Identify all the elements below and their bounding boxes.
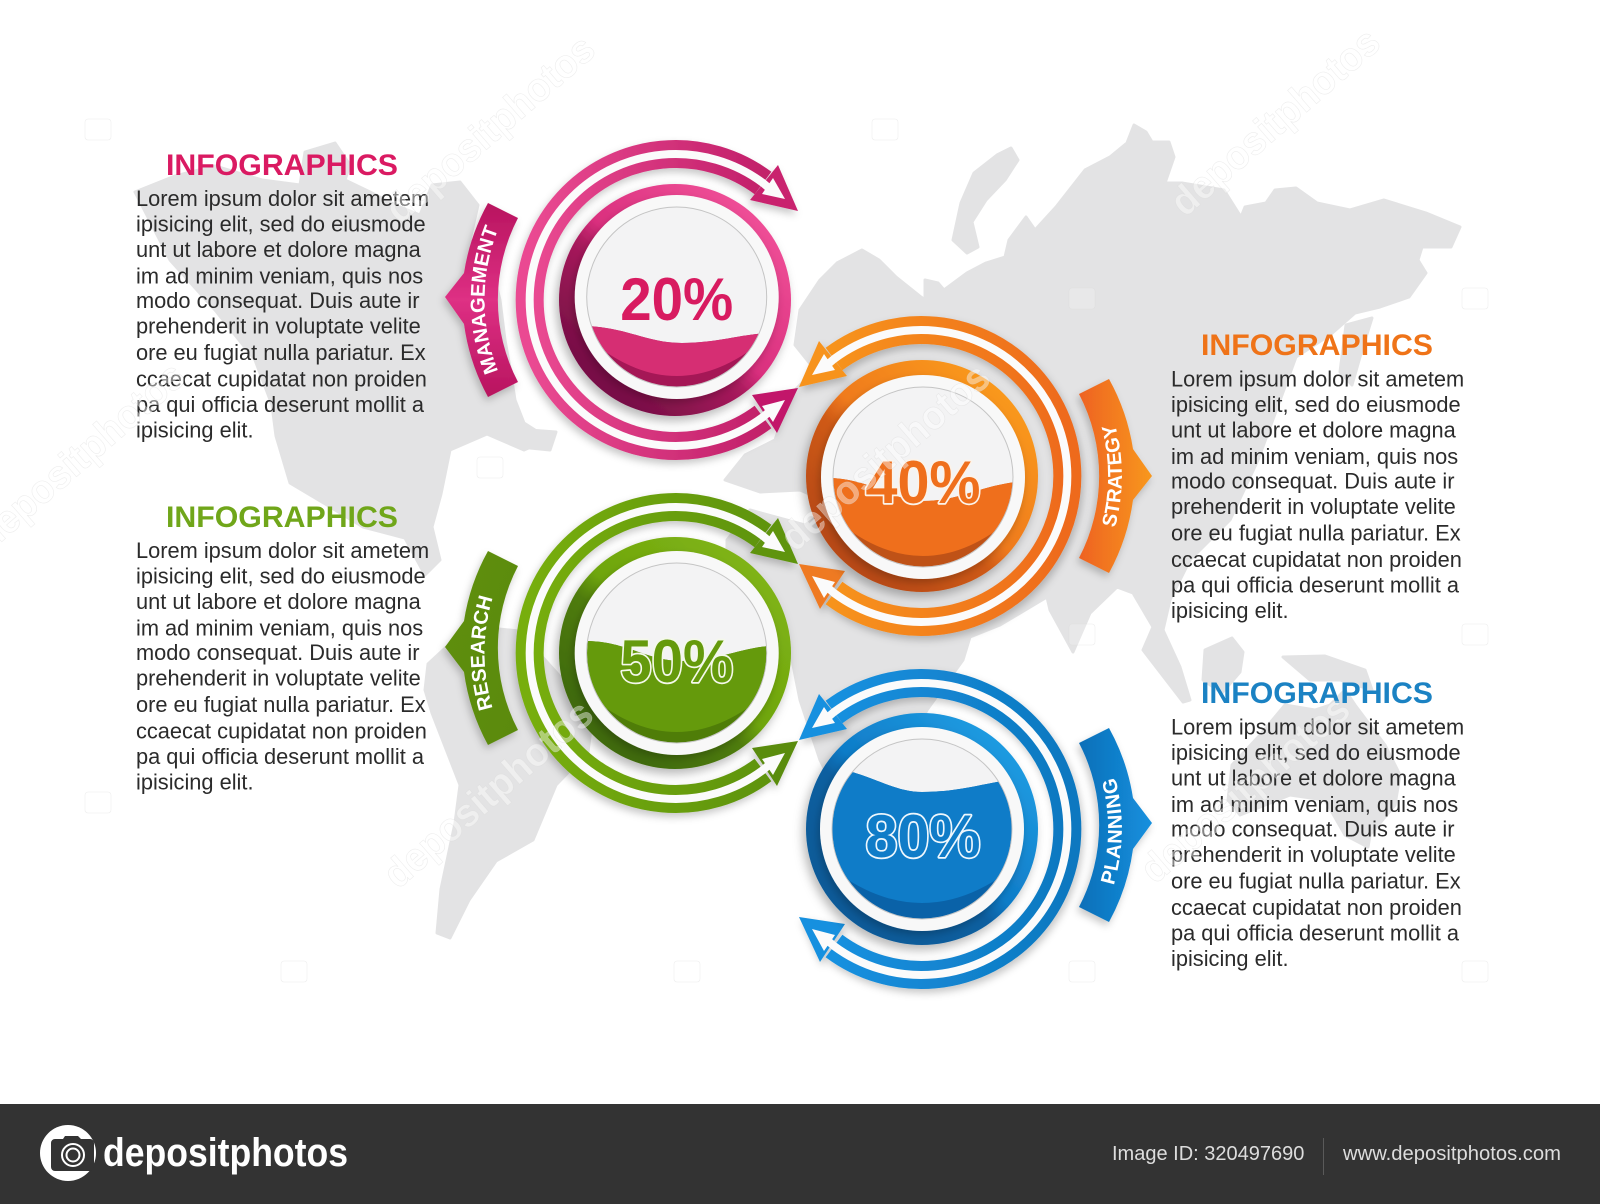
watermark overlay: depositphotos (375, 692, 602, 897)
ribbon: strategy (1076, 379, 1152, 578)
text block: pink infographics: ipisicing elit. (136, 418, 254, 443)
arrows: green circular (530, 507, 798, 799)
panel: planning (blue) (798, 669, 1464, 997)
text block: orange infographics: ore eu fugiat nulla pariatur. Ex (1171, 521, 1461, 546)
world map (135, 125, 1460, 938)
arrows: pink circular (530, 154, 798, 446)
text block: orange infographics: pa qui officia deserunt mollit a (1171, 573, 1460, 598)
text block: green infographics: modo consequat. Duis aute ir (136, 640, 420, 665)
ribbon: management: MANAGEMENT (470, 224, 498, 375)
text block: orange infographics: prehenderit in voluptate velite (1171, 494, 1456, 519)
watermark overlay: depositphotos (1132, 687, 1359, 892)
text block: pink infographics: pa qui officia deserunt mollit a (136, 392, 425, 417)
text block: green infographics: ipisicing elit, sed do eiusmode (136, 564, 426, 588)
text block: green infographics: prehenderit in voluptate velite (136, 666, 421, 690)
text block: blue infographics: INFOGRAPHICS (1201, 677, 1433, 710)
ribbon: research: RESEARCH (470, 595, 492, 711)
text block: blue infographics: ore eu fugiat nulla pariatur. Ex (1171, 869, 1461, 894)
text block: pink infographics: unt ut labore et dolore magna (136, 237, 422, 262)
panel: research (green) (136, 493, 798, 821)
text block: green infographics: im ad minim veniam, quis nos (136, 616, 423, 640)
gauge: 40 percent: 40% (866, 449, 980, 516)
text block: pink infographics: ccaecat cupidatat non proiden (136, 367, 427, 392)
text block: pink infographics: Lorem ipsum dolor sit ametem (136, 186, 429, 211)
text block: green infographics: ore eu fugiat nulla pariatur. Ex (136, 692, 426, 717)
ribbon: research (441, 551, 518, 750)
watermark overlay: depositphotos (1162, 20, 1389, 225)
gauge: 50 percent: 50% (620, 628, 733, 695)
ribbon: strategy: STRATEGY (1102, 427, 1122, 527)
text block: pink infographics: ipisicing elit, sed do eiusmode (136, 212, 426, 236)
text block: pink infographics: modo consequat. Duis aute ir (136, 288, 420, 313)
footer bar (0, 1104, 1600, 1204)
arrows: orange circular (799, 330, 1067, 622)
image id: Image ID: 320497690 (1112, 1143, 1304, 1165)
watermark overlay (0, 20, 1488, 982)
ribbon: planning: PLANNING (1100, 778, 1122, 884)
text block: orange infographics: ipisicing elit. (1171, 598, 1289, 623)
text block: blue infographics (1171, 677, 1464, 971)
text block: orange infographics: im ad minim veniam, quis nos (1171, 444, 1458, 469)
gauge: 20 percent (559, 184, 791, 416)
text block: green infographics: unt ut labore et dolore magna (136, 589, 422, 614)
text block: green infographics: pa qui officia deserunt mollit a (136, 744, 425, 769)
panel: strategy (orange) (798, 316, 1464, 644)
watermark overlay: depositphotos (377, 27, 604, 232)
text block: blue infographics: Lorem ipsum dolor sit ametem (1171, 715, 1464, 740)
text block: orange infographics: INFOGRAPHICS (1201, 329, 1433, 362)
text block: orange infographics: modo consequat. Duis aute ir (1171, 469, 1455, 494)
text block: blue infographics: im ad minim veniam, quis nos (1171, 792, 1458, 817)
text block: green infographics: ccaecat cupidatat non proiden (136, 719, 427, 744)
text block: blue infographics: modo consequat. Duis aute ir (1171, 817, 1455, 842)
text block: pink infographics: prehenderit in voluptate velite (136, 314, 421, 338)
text block: blue infographics: ipisicing elit, sed do eiusmode (1171, 740, 1461, 765)
text block: orange infographics: Lorem ipsum dolor sit ametem (1171, 367, 1464, 392)
brand wordmark: depositphotos (103, 1131, 348, 1175)
text block: pink infographics: im ad minim veniam, quis nos (136, 264, 423, 288)
gauge: 50 percent (559, 537, 791, 769)
text block: orange infographics: ccaecat cupidatat non proiden (1171, 547, 1462, 572)
text block: orange infographics (1171, 329, 1464, 623)
gauge: 80 percent: 80% (866, 803, 980, 870)
icon: depositphotos camera logo (40, 1125, 96, 1181)
watermark overlay: depositphotos (772, 355, 999, 560)
text block: blue infographics: ipisicing elit. (1171, 946, 1289, 971)
ribbon: management (442, 203, 518, 402)
text block: pink infographics (136, 149, 429, 443)
text block: blue infographics: unt ut labore et dolore magna (1171, 766, 1457, 791)
ribbon: planning (1075, 728, 1152, 928)
panel: management (pink) (136, 140, 798, 468)
text block: green infographics: ipisicing elit. (136, 770, 254, 795)
arrows: blue circular (799, 683, 1067, 975)
text block: blue infographics: ccaecat cupidatat non proiden (1171, 895, 1462, 920)
text block: pink infographics: ore eu fugiat nulla pariatur. Ex (136, 340, 426, 365)
text block: orange infographics: ipisicing elit, sed do eiusmode (1171, 392, 1461, 417)
text block: blue infographics: prehenderit in voluptate velite (1171, 842, 1456, 867)
website url: www.depositphotos.com (1342, 1143, 1561, 1165)
text block: green infographics (136, 501, 429, 795)
gauge: 40 percent (806, 360, 1038, 592)
gauge: 80 percent (806, 713, 1038, 945)
gauge: 20 percent: 20% (620, 266, 733, 333)
text block: green infographics: INFOGRAPHICS (166, 501, 398, 534)
text block: green infographics: Lorem ipsum dolor sit ametem (136, 538, 429, 563)
text block: orange infographics: unt ut labore et dolore magna (1171, 418, 1457, 443)
text block: blue infographics: pa qui officia deserunt mollit a (1171, 921, 1460, 946)
text block: pink infographics: INFOGRAPHICS (166, 149, 398, 182)
